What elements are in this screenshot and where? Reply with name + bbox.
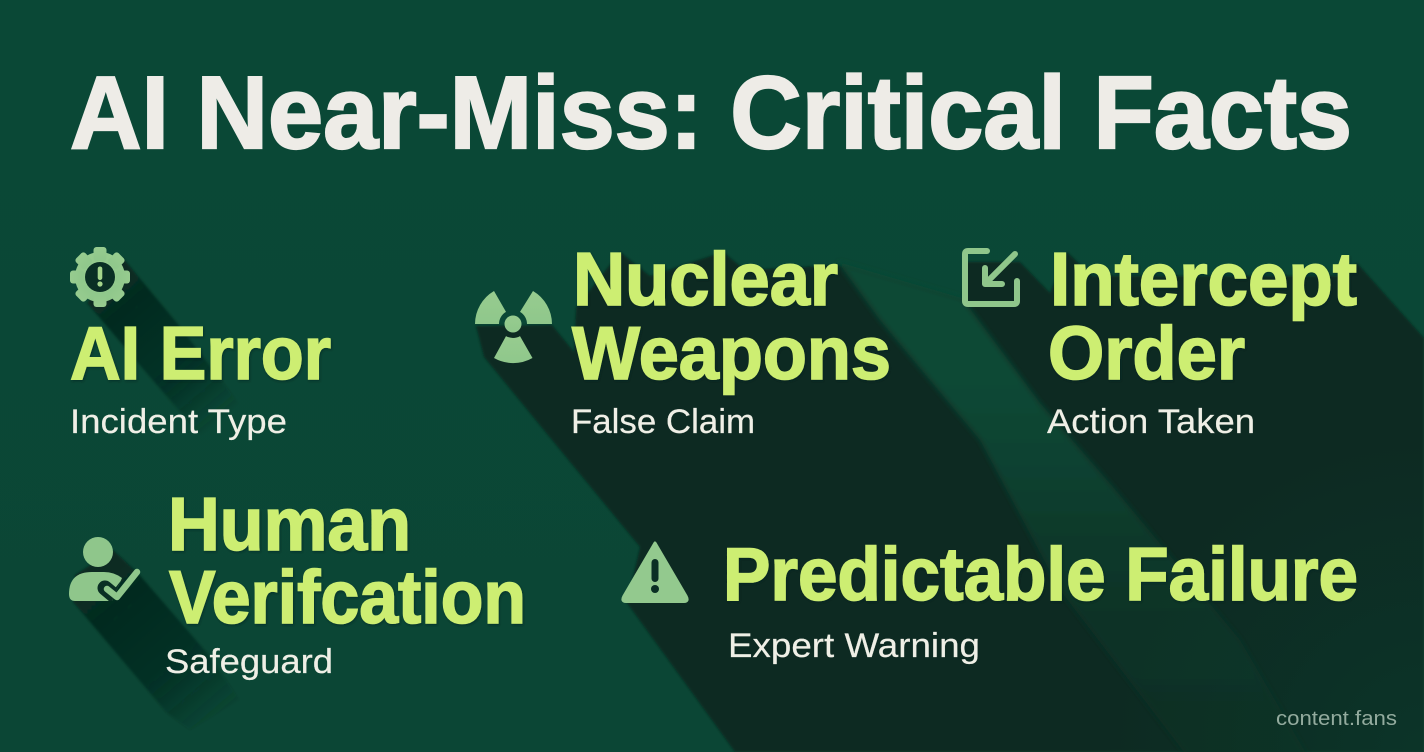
- shadow: gear and AI Error: [87, 258, 240, 440]
- icon: warning triangle: [623, 543, 687, 602]
- heading: Intercept Order: Intercept: [1050, 237, 1357, 321]
- heading: Nuclear Weapons: Weapons: [572, 311, 891, 395]
- panel: Human Verification: [69, 482, 526, 681]
- heading: Human Verifcation: Verifcation: [169, 555, 526, 639]
- label: False Claim: False Claim: [571, 403, 755, 441]
- label: Incident Type: Incident Type: [70, 403, 287, 441]
- light band between shadows: [838, 262, 1310, 752]
- icon: intercept arrow into box: [965, 251, 1017, 304]
- heading: Intercept Order: Order: [1048, 311, 1245, 395]
- icon: radiation: [475, 291, 552, 363]
- heading: Human Verifcation: Human: [168, 482, 411, 566]
- heading: Intercept Order: [1048, 237, 1357, 395]
- panel: Nuclear Weapons: [475, 237, 891, 441]
- label: Safeguard: Safeguard: [165, 643, 333, 681]
- icon: person with check: [69, 537, 137, 601]
- heading: Predictable Failure: Predictable Failure: [723, 532, 1358, 616]
- label: Action Taken: Action Taken: [1047, 403, 1255, 441]
- panel: AI Error: [70, 247, 331, 441]
- panel: Predictable Failure: [623, 532, 1358, 665]
- shadow: person and Human Verification: [73, 550, 240, 730]
- heading: Nuclear Weapons: [572, 237, 891, 395]
- credit: content.fans: content.fans: [1276, 708, 1397, 730]
- long shadows: [73, 252, 1424, 752]
- shadow: radiation, warning, Nuclear and Intercept merged: [476, 252, 1424, 752]
- panel: Intercept Order: [965, 237, 1357, 441]
- heading: Nuclear Weapons: Nuclear: [573, 237, 838, 321]
- icon: gear with exclamation: [70, 247, 130, 307]
- label: Expert Warning: Expert Warning: [728, 627, 980, 665]
- title: AI Near-Miss: Critical Facts: [70, 55, 1352, 170]
- heading: AI Error: AI Error: [70, 311, 331, 395]
- heading: Human Verifcation: [168, 482, 526, 639]
- corner fade: [1000, 400, 1424, 752]
